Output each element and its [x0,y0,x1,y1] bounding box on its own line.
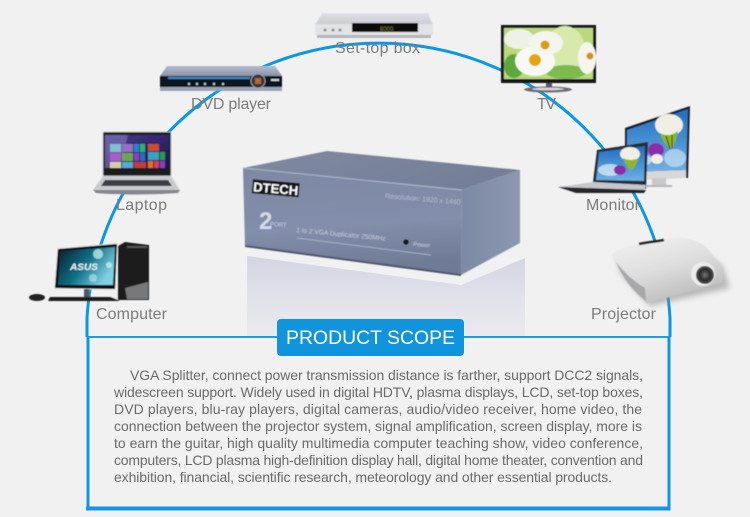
device: DVD player [160,66,282,91]
label: DVD player: DVD player [191,96,272,113]
label: laptop: Laptop [116,197,167,214]
connection arc [87,43,670,337]
balloon small [648,143,664,157]
label: projector: Projector [591,306,657,323]
mouse [29,294,45,301]
device: computer: ASUS [69,262,98,272]
body text: computers, LCD plasma high-definition display hall, digital home theater, convention and [114,452,643,468]
flower petals [515,46,555,76]
power led [403,239,409,245]
resolution text: Resolution: 1920 x 1440 [385,193,461,207]
lens [691,262,715,286]
device: computer [29,242,149,301]
label: monitor: Monitor [586,197,641,214]
TV stand [546,82,552,88]
body text: DVD players, blu-ray players, digital cameras, audio/video receiver, home video, the [114,401,642,417]
top vent [639,240,664,244]
label: computer: Computer [96,306,168,323]
desktop monitor [625,106,690,178]
label: set-top box: Set-top box [335,40,420,57]
panel: product scope [86,319,670,509]
box right side [461,170,520,275]
body text: to earn the guitar, high quality multimedia computer teaching show, video conference, [114,435,643,451]
brand logo: DTECH [253,179,299,198]
product: VGA splitter box: PORT [270,222,287,229]
body text: widescreen support. Widely used in digital HDTV, plasma displays, LCD, set-top boxes, [113,384,643,400]
tower [118,242,149,300]
tiles [110,144,165,168]
monitor [54,243,118,290]
device: laptop [93,132,180,194]
box top [243,151,520,190]
laptop [593,142,648,189]
product: VGA splitter box [243,151,520,275]
balloon large [655,114,683,136]
body text: exhibition, financial, scientific research, meteorology and other essential products. [114,469,612,485]
box front [243,168,462,275]
product reflection [247,256,525,337]
device: set-top box [315,13,433,38]
device: monitor group [558,106,690,193]
product: VGA splitter box: Power [413,242,430,249]
device: projector [612,238,730,306]
body text: connection between the projector system, signal amplification, screen display, more is [114,418,642,434]
device: set-top box: 8000 [380,27,394,33]
label: TV: TV [537,96,556,113]
body text: VGA Splitter, connect power transmission distance is farther, support DCC2 signals, [130,367,643,383]
stand [84,289,89,297]
panel frame [88,337,669,509]
keyboard [48,297,120,301]
side vent [616,262,646,301]
body text [113,367,643,485]
device: TV [501,25,596,92]
title badge: PRODUCT SCOPE [286,327,455,349]
model text: 1 to 2 VGA Duplicator 250MHz [296,227,386,243]
title badge [277,319,464,356]
2 port mark: 2 [259,208,272,235]
